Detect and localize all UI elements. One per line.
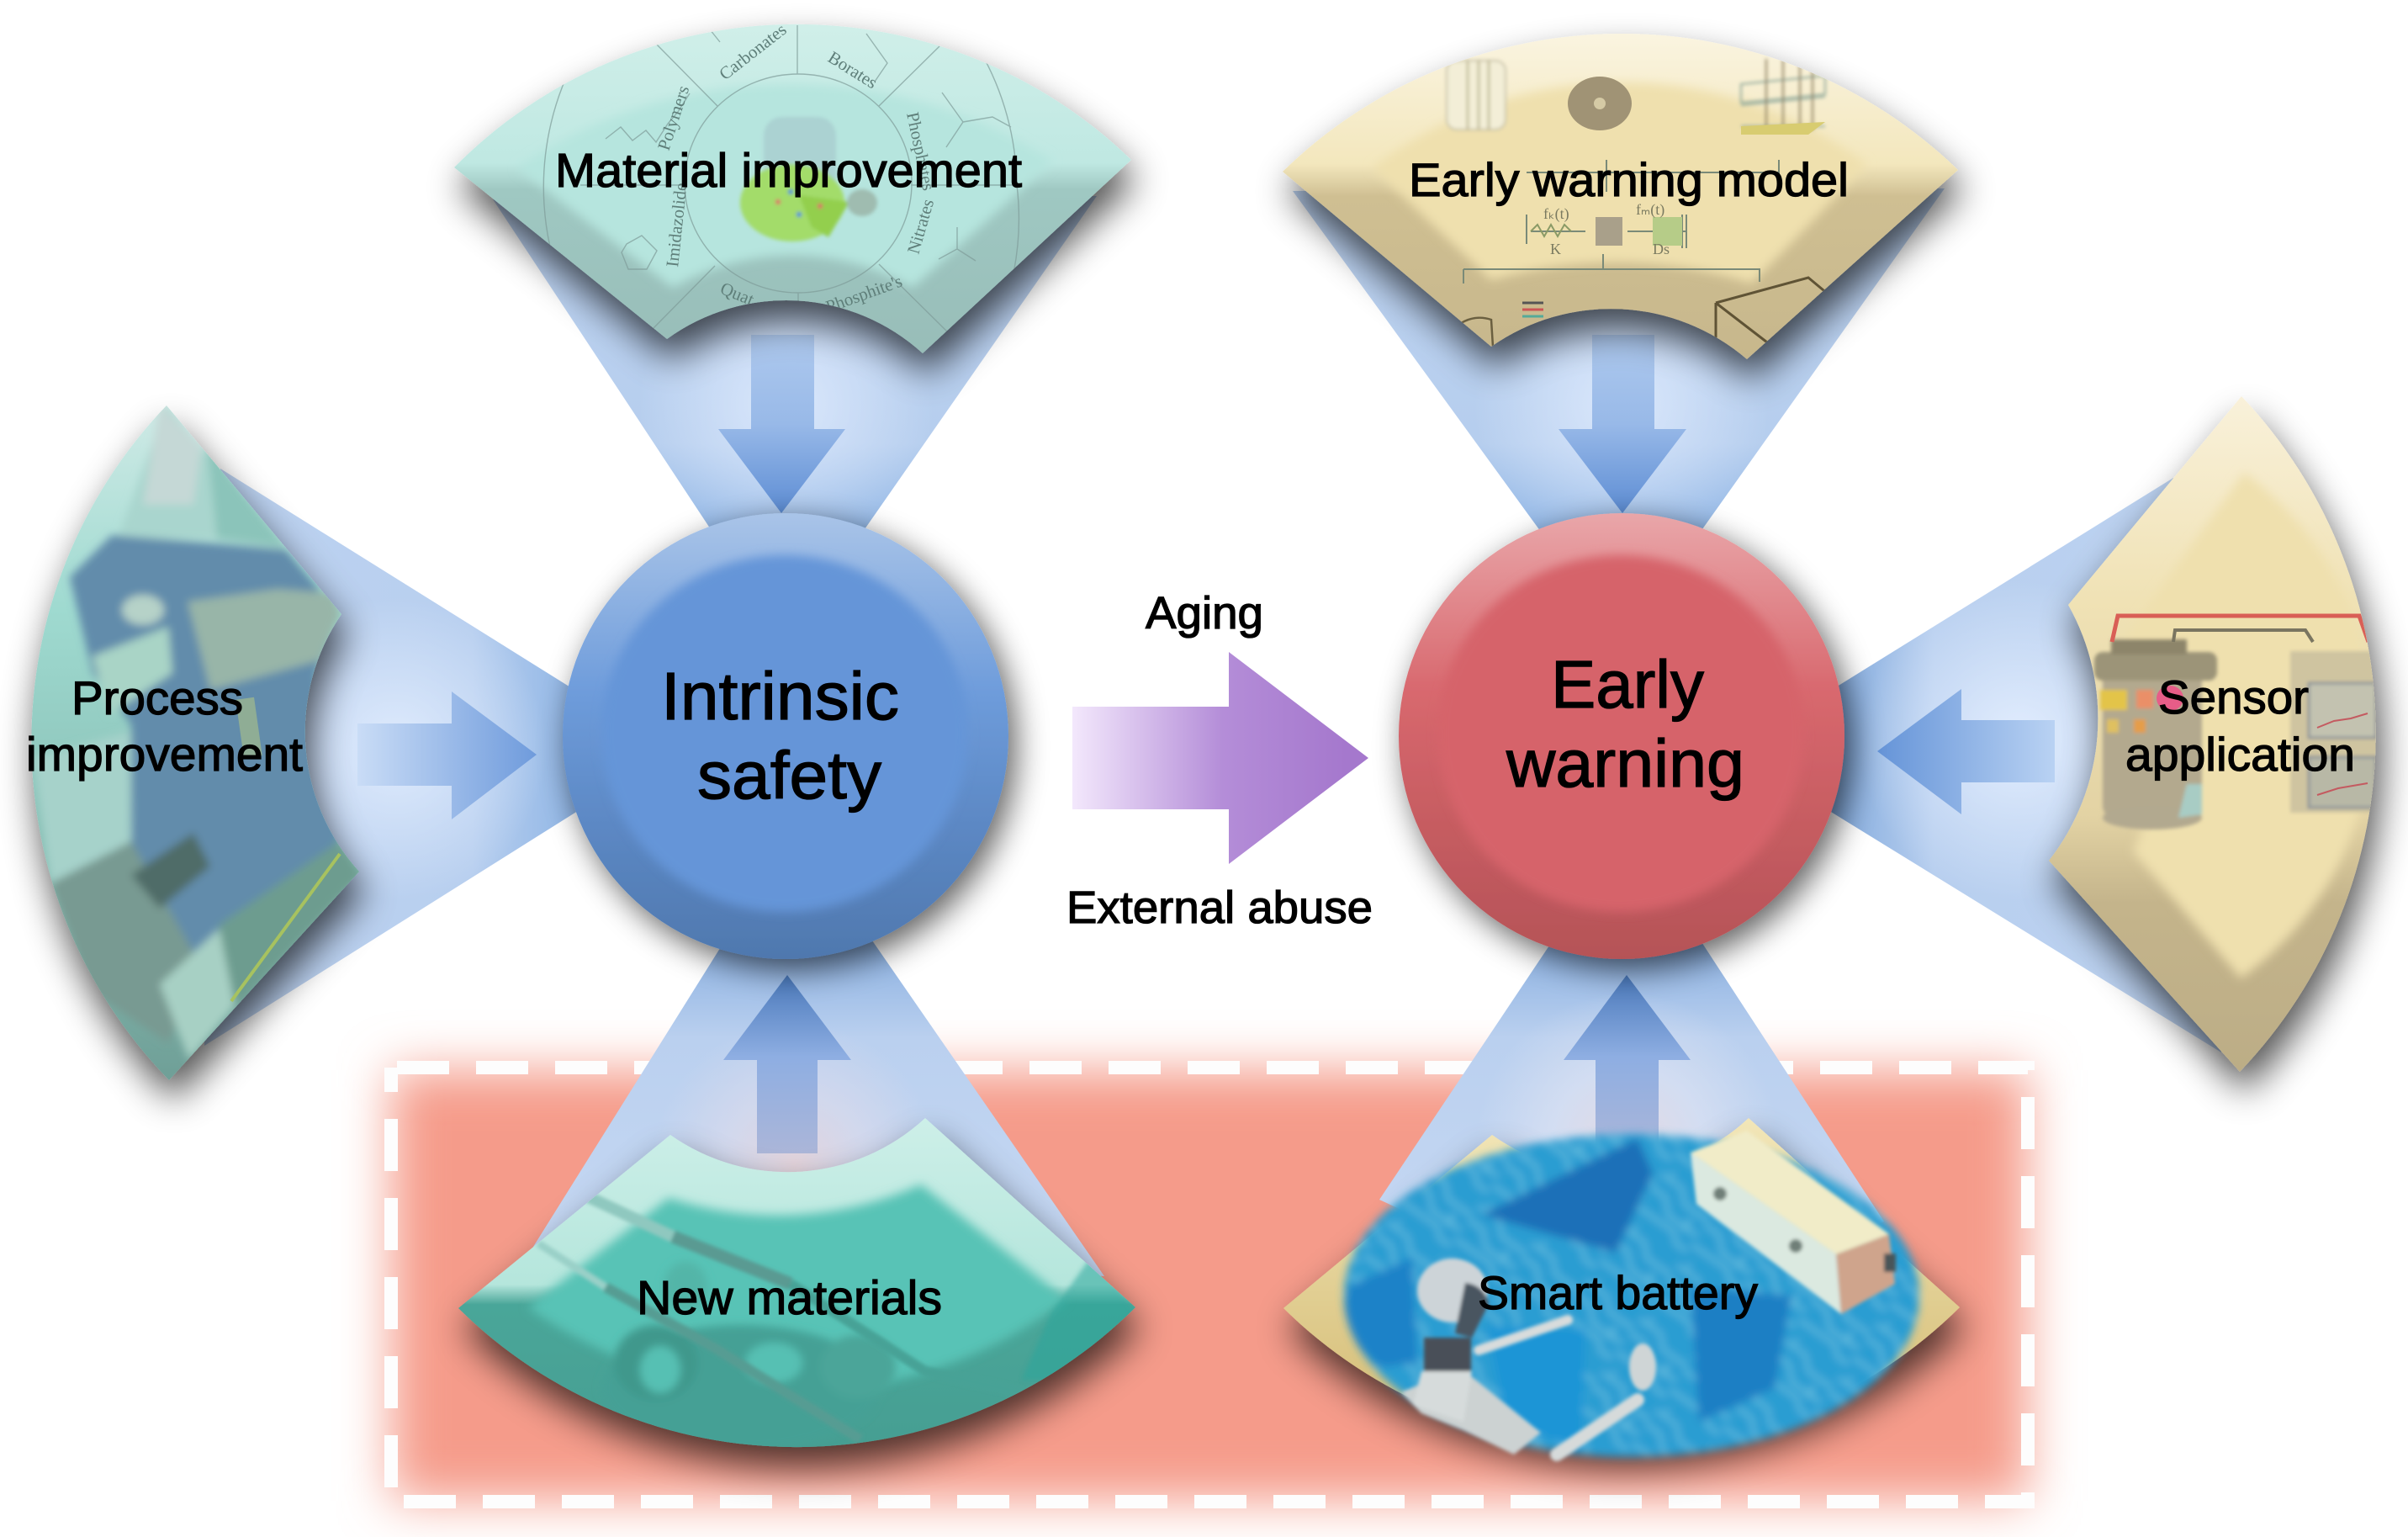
illustration: battery box bbox=[1691, 1131, 1896, 1314]
beam: sensor application to early warning bbox=[1733, 478, 2221, 1052]
panel: new materials bbox=[437, 1102, 1152, 1455]
panel: smart battery bbox=[1262, 1102, 1977, 1464]
panel: early warning model: fₖ(t) bbox=[1543, 205, 1569, 223]
panel: process improvement bbox=[17, 395, 370, 1094]
panel: material improvement bbox=[421, 0, 1178, 370]
panel: early warning model: fₘ(t) bbox=[1636, 201, 1664, 219]
panel: material improvement: Carbonates bbox=[715, 19, 791, 84]
label: Material improvement: Material improvement bbox=[555, 144, 1022, 198]
arrow: process improvement right bbox=[357, 692, 537, 819]
panel: material improvement: Nitrates bbox=[903, 197, 938, 256]
arrow: material improvement down bbox=[718, 335, 845, 513]
beam: material improvement to intrinsic safety bbox=[493, 196, 1097, 643]
arrow: new materials up bbox=[723, 975, 851, 1153]
arrow: aging and external abuse bbox=[1072, 652, 1368, 864]
label: Aging: Aging bbox=[1146, 588, 1263, 639]
label: External abuse: External abuse bbox=[1066, 882, 1373, 933]
beam: early warning model to early warning bbox=[1293, 188, 1945, 643]
label: Early warning: warning bbox=[1506, 726, 1744, 801]
label: Process improvement bbox=[26, 671, 303, 782]
label: Intrinsic safety: safety bbox=[697, 738, 881, 813]
label: Sensor application bbox=[2125, 670, 2355, 781]
label: Intrinsic safety: Intrinsic bbox=[661, 659, 899, 734]
label: Early warning model: Early warning model bbox=[1409, 153, 1849, 206]
panel: material improvement: Quat bbox=[717, 278, 757, 310]
label: Intrinsic safety bbox=[661, 659, 899, 813]
illustration: robot bbox=[1401, 1259, 1656, 1455]
label: Sensor application: Sensor bbox=[2158, 670, 2309, 723]
beam: new materials to intrinsic safety bbox=[533, 829, 1104, 1276]
beam: smart battery to early warning bbox=[1379, 829, 1884, 1262]
panel: material improvement: Imidazolide bbox=[662, 182, 691, 268]
panel: material improvement: Borates bbox=[824, 47, 881, 93]
arrow: sensor application left bbox=[1877, 689, 2055, 814]
panel: material improvement: Phosphates bbox=[902, 110, 939, 192]
panel: material improvement: Phosphite's bbox=[823, 271, 905, 317]
illustration: circuit board bbox=[1337, 1127, 1926, 1464]
label: New materials: New materials bbox=[637, 1271, 942, 1325]
label: Early warning bbox=[1506, 647, 1744, 801]
label: Smart battery: Smart battery bbox=[1478, 1266, 1758, 1319]
arrow: early warning model down bbox=[1559, 335, 1686, 513]
panel: highlighted dashed region bbox=[391, 1068, 2028, 1502]
panel: early warning model bbox=[1262, 0, 1985, 370]
panel: sensor application bbox=[2035, 387, 2389, 1085]
circle: Intrinsic safety bbox=[563, 513, 1008, 959]
arrow: smart battery up bbox=[1564, 975, 1691, 1157]
label: Sensor application: application bbox=[2125, 728, 2355, 781]
panel: early warning model: K bbox=[1550, 241, 1561, 257]
circle: Early warning bbox=[1399, 513, 1844, 959]
panel: early warning model: Ds bbox=[1653, 241, 1670, 257]
label: Process improvement: Process bbox=[71, 671, 243, 724]
beam: process improvement to intrinsic safety bbox=[204, 469, 673, 1046]
panel: material improvement: Polymers bbox=[654, 83, 693, 153]
label: Process improvement: improvement bbox=[26, 728, 303, 782]
label: Early warning: Early bbox=[1551, 647, 1704, 722]
